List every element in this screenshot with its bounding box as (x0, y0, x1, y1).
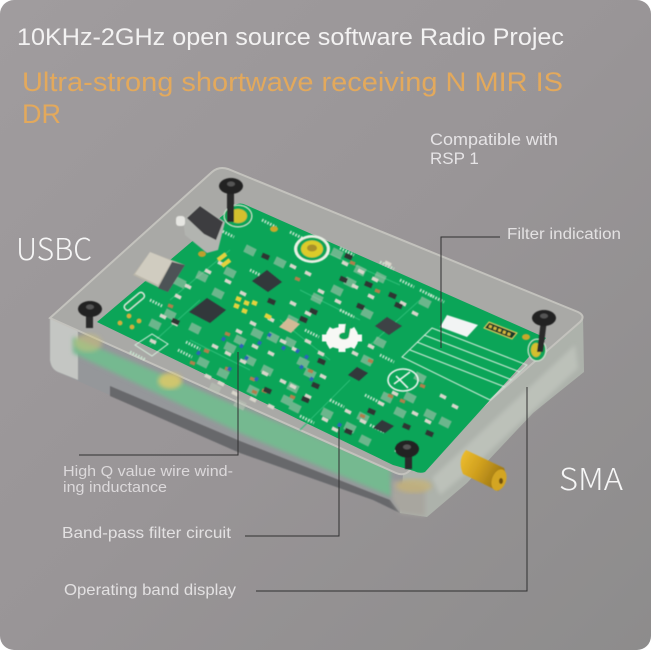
pcb traces (150, 250, 420, 430)
SMA gold connector (461, 450, 509, 493)
frequency table (402, 328, 527, 400)
crystal (279, 318, 300, 333)
label: compatible: RSP 1 (430, 149, 479, 168)
screw right (532, 310, 556, 352)
label: operating band: Operating band display (64, 582, 236, 599)
label: wire inductance (63, 463, 233, 496)
small components: dark (172, 255, 433, 435)
screw left (78, 301, 102, 328)
mottled bottom corner (392, 480, 425, 516)
mounting pad top (224, 205, 252, 227)
white label rectangle (440, 315, 478, 337)
label: filter indication: Filter indication (507, 226, 621, 243)
screw top (219, 178, 243, 222)
dark lower edge of the side (110, 386, 400, 513)
subtitle (22, 67, 563, 129)
yellow solder pads (218, 254, 271, 318)
white gear logo (322, 320, 362, 352)
pin pad group (118, 314, 142, 330)
label: band-pass filter: Band-pass filter circuit (62, 525, 232, 542)
case top face (50, 168, 583, 474)
USB port bulge (120, 232, 163, 272)
board details (74, 178, 556, 493)
mounting pad right (528, 339, 546, 361)
chip small (348, 367, 368, 381)
chip right (375, 317, 402, 335)
label: compatible (430, 130, 558, 168)
chip center (252, 270, 282, 292)
small components: blue (197, 334, 341, 426)
screw bottom (395, 440, 419, 469)
leader line: band-pass filter (245, 427, 339, 536)
small pad (270, 226, 278, 232)
label: wire inductance: High Q value wire wind- (63, 463, 233, 480)
leader line: wire inductance (79, 352, 238, 455)
green board seen through the side (73, 337, 392, 497)
header pins (484, 322, 517, 339)
label: USBC: USBC (16, 225, 92, 269)
case lower left side (50, 318, 427, 517)
waste bin mark (135, 334, 168, 356)
small components: light (150, 262, 458, 431)
subtitle: Ultra-strong shortwave receiving N MIR IS (22, 67, 563, 97)
circular logo (388, 369, 418, 391)
chip lower (373, 420, 394, 433)
leader line: filter indication (441, 237, 500, 348)
gold glow through the case (396, 479, 432, 493)
USB-C connector (133, 252, 185, 292)
clear left end of the side (50, 318, 78, 380)
small components: orange and grey (168, 262, 425, 417)
label: wire inductance: ing inductance (63, 479, 167, 496)
component clusters (150, 248, 450, 443)
label: SMA: SMA (559, 455, 623, 499)
product: transparent case with radio board (50, 168, 584, 517)
label: compatible: Compatible with (430, 130, 558, 149)
subtitle: DR (22, 99, 61, 129)
USB icon on board (123, 291, 146, 312)
mounting pad center (294, 235, 330, 263)
audio jack (176, 205, 225, 257)
green circuit board (97, 204, 546, 473)
title: 10KHz-2GHz open source software Radio Projec (17, 24, 564, 51)
case lower right side (400, 316, 584, 517)
chip left (189, 298, 226, 323)
silk marks (130, 220, 444, 457)
leader line: operating band (256, 387, 527, 591)
